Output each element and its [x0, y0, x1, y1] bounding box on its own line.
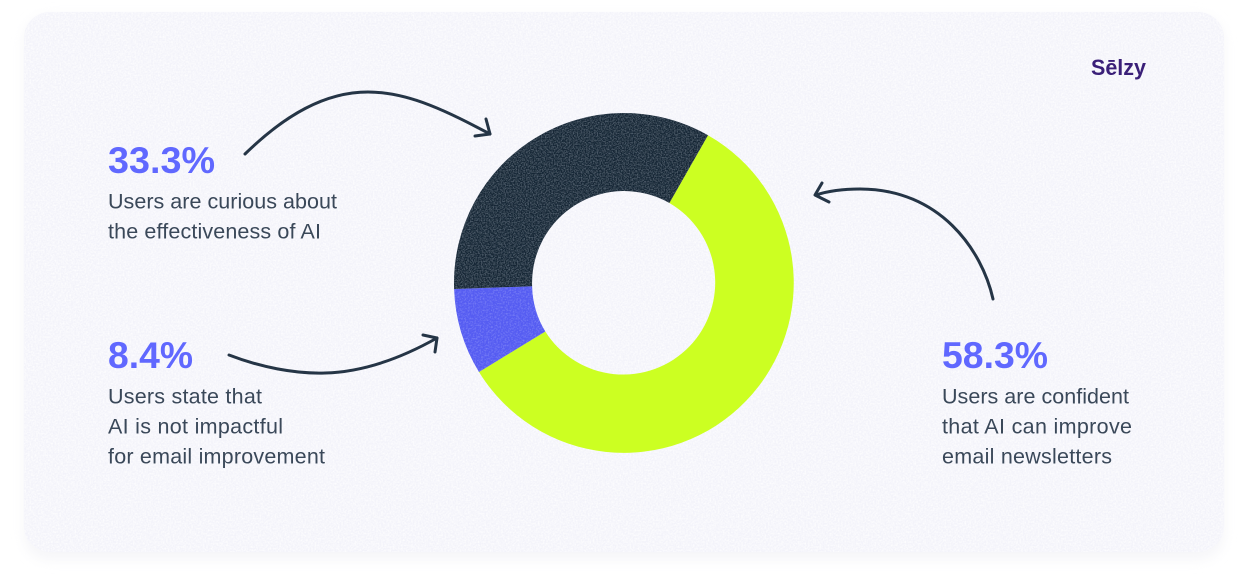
- segment: 58.3% confident: [479, 135, 794, 453]
- description: confident: Users are confident: [942, 384, 1129, 408]
- value: 58.3%: 58.3%: [942, 335, 1048, 376]
- description: curious: Users are curious about: [108, 190, 337, 214]
- description: not impactful: Users state that: [108, 384, 262, 408]
- value: 8.4%: 8.4%: [108, 335, 193, 376]
- donut chart: [454, 113, 794, 453]
- description: curious: [108, 190, 337, 244]
- segment: 33.3% curious: [454, 113, 708, 289]
- description: confident: email newsletters: [942, 444, 1112, 468]
- segment: 8.4% not impactful: [454, 286, 545, 372]
- description: not impactful: AI is not impactful: [108, 414, 283, 438]
- callout: 58.3%: [942, 335, 1132, 468]
- description: not impactful: [108, 384, 325, 468]
- callout: 33.3%: [108, 140, 337, 244]
- logo: Selzy: Sēlzy: [1091, 55, 1147, 80]
- description: not impactful: for email improvement: [108, 444, 325, 468]
- description: curious: the effectiveness of AI: [108, 220, 321, 244]
- description: confident: [942, 384, 1132, 468]
- value: 33.3%: 33.3%: [108, 140, 215, 181]
- description: confident: that AI can improve: [942, 414, 1132, 438]
- callout: 8.4%: [108, 335, 325, 468]
- arrow: 8.4% to donut: [229, 335, 437, 373]
- arrow: 58.3% to donut: [815, 183, 993, 299]
- arrow: 33.3% to donut: [245, 92, 490, 154]
